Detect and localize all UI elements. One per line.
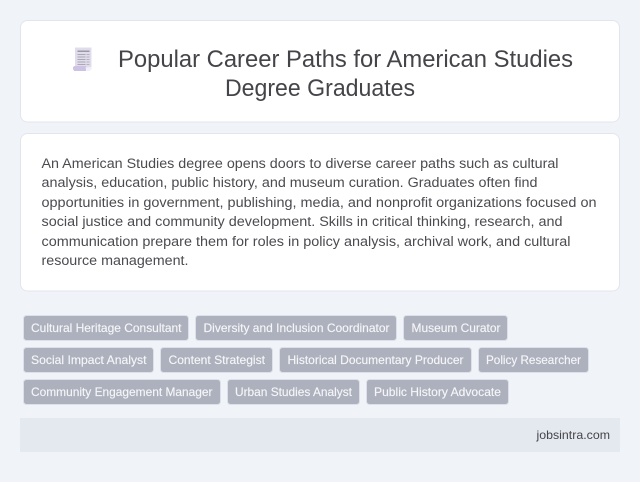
text block: description: social justice and community development. Skills in critical thinking, research, and [42, 214, 562, 230]
text block: description: communication prepare them for roles in policy analysis, archival work, and cultural [42, 234, 570, 250]
tag: Historical Documentary Producer: Historical Documentary Producer [288, 353, 464, 367]
tag: Urban Studies Analyst: Urban Studies Analyst [235, 385, 353, 399]
text block: description [42, 156, 596, 269]
tag: Diversity and Inclusion Coordinator: Diversity and Inclusion Coordinator [204, 321, 390, 335]
tag: Community Engagement Manager [24, 380, 220, 404]
tag: Policy Researcher [478, 348, 588, 372]
tag: Historical Documentary Producer [280, 348, 472, 372]
footer source text: jobsintra.com [535, 428, 610, 442]
text block: description: analysis, education, public history, and museum curation. Graduates often find [42, 175, 538, 191]
icon: document scroll [73, 48, 92, 71]
career tags [24, 316, 588, 404]
tag: Cultural Heritage Consultant [24, 316, 188, 340]
tag: Content Strategist: Content Strategist [168, 353, 266, 367]
tag: Policy Researcher: Policy Researcher [486, 353, 581, 367]
text block: description: An American Studies degree opens doors to diverse career paths such as cultural [42, 156, 558, 172]
title: Degree Graduates [225, 75, 415, 102]
tag: Community Engagement Manager: Community Engagement Manager [31, 385, 212, 399]
tag: Museum Curator: Museum Curator [412, 321, 500, 335]
tag: Museum Curator [404, 316, 508, 340]
tag: Social Impact Analyst: Social Impact Analyst [31, 353, 147, 367]
panel: description [20, 134, 620, 291]
text block: description: opportunities in government, publishing, media, and nonprofit organizations focused on [42, 195, 596, 211]
title [118, 46, 573, 102]
tag: Diversity and Inclusion Coordinator [196, 316, 396, 340]
tag: Public History Advocate [366, 380, 508, 404]
tag: Content Strategist [160, 348, 272, 372]
text block: description: resource management. [42, 253, 188, 269]
panel: header [20, 20, 620, 122]
tag: Social Impact Analyst [24, 348, 154, 372]
tag: Urban Studies Analyst [228, 380, 360, 404]
footer [20, 418, 620, 452]
tag: Public History Advocate: Public History Advocate [374, 385, 501, 399]
title: Popular Career Paths for American Studies [118, 46, 573, 73]
tag: Cultural Heritage Consultant: Cultural Heritage Consultant [31, 321, 182, 335]
